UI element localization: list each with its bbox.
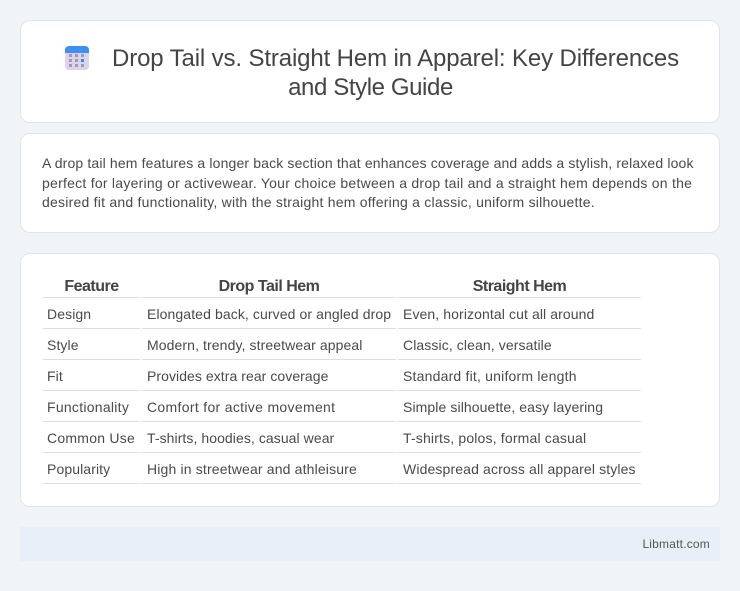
table headers: Feature <box>64 278 119 295</box>
table rows: Design <box>47 306 91 322</box>
panel: title card <box>20 20 720 123</box>
panel: comparison table <box>20 253 720 507</box>
table rows: Even, horizontal cut all around <box>403 306 594 322</box>
footer credit: Libmatt.com <box>642 537 710 551</box>
table headers: Straight Hem <box>473 278 566 295</box>
table rows: Functionality <box>47 399 129 415</box>
table rows: Classic, clean, versatile <box>403 337 552 353</box>
title: and Style Guide <box>288 74 453 101</box>
table headers <box>64 278 566 295</box>
table rows: Modern, trendy, streetwear appeal <box>147 337 362 353</box>
table rows: Comfort for active movement <box>147 399 335 415</box>
intro paragraph: perfect for layering or activewear. Your choice between a drop tail and a straight hem depends on the <box>42 174 692 190</box>
table rows: Simple silhouette, easy layering <box>403 399 603 415</box>
table rows: T-shirts, hoodies, casual wear <box>147 430 334 446</box>
panel: intro text <box>20 133 720 233</box>
table rows: Common Use <box>47 430 135 446</box>
title: Drop Tail vs. Straight Hem in Apparel: Key Differences <box>112 45 679 72</box>
table rows: Fit <box>47 368 63 384</box>
title <box>112 45 679 101</box>
intro paragraph <box>42 155 694 210</box>
table rows: High in streetwear and athleisure <box>147 461 357 477</box>
table rows: Provides extra rear coverage <box>147 368 328 384</box>
table headers: Drop Tail Hem <box>219 278 319 295</box>
intro paragraph: A drop tail hem features a longer back section that enhances coverage and adds a stylish, relaxed look <box>42 155 694 171</box>
table rows <box>43 297 641 484</box>
icon: calendar <box>65 46 89 70</box>
footer bar <box>20 527 720 561</box>
table rows: Standard fit, uniform length <box>403 368 577 384</box>
intro paragraph: desired fit and functionality, with the straight hem offering a classic, uniform silhouette. <box>42 194 595 210</box>
table rows: Widespread across all apparel styles <box>403 461 636 477</box>
table rows: Elongated back, curved or angled drop <box>147 306 391 322</box>
table rows: Style <box>47 337 79 353</box>
table rows: T-shirts, polos, formal casual <box>403 430 586 446</box>
table rows: Popularity <box>47 461 110 477</box>
